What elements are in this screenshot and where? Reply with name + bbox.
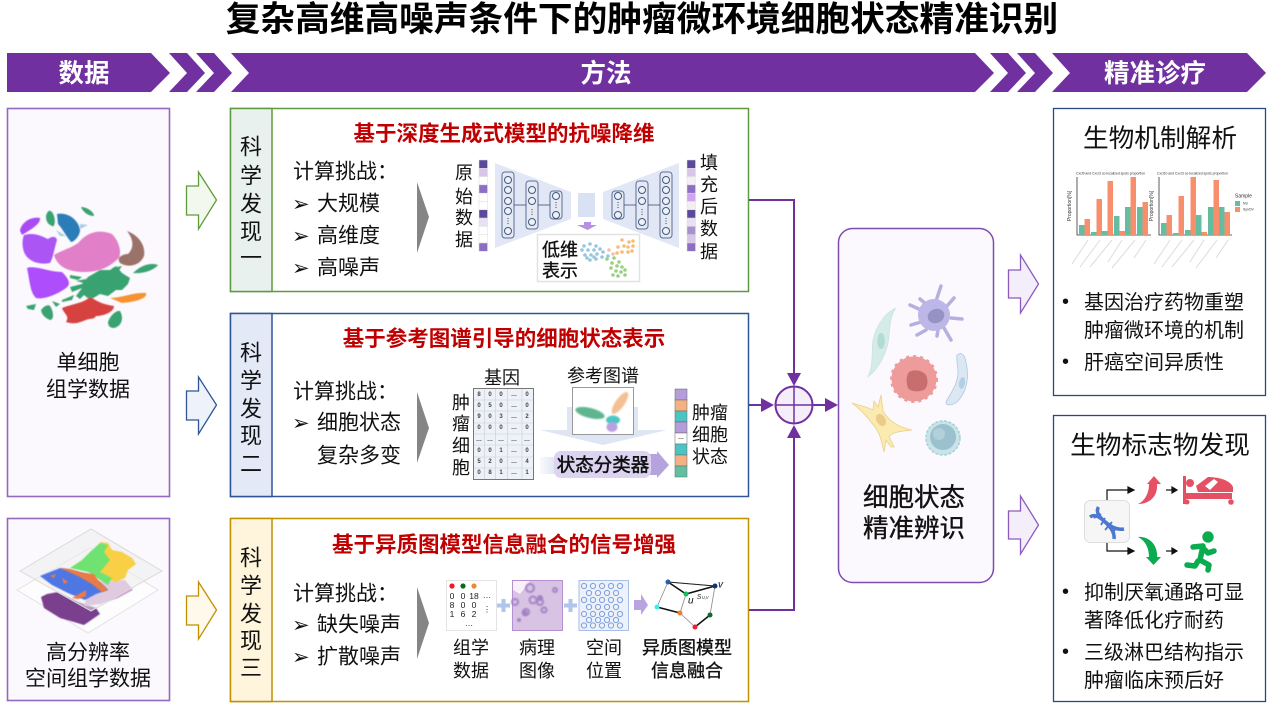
panel: discovery three [230,518,748,702]
bullets: • [1062,291,1069,313]
gene expression matrix: 5 [488,403,492,409]
chart: proportion bars [1067,172,1254,268]
omics data card: 0 [450,591,455,601]
labels: inputs: 位置 [586,661,622,681]
icon: purple dendritic cell [910,286,962,340]
label: raw data: 始 [455,187,473,207]
plus [564,599,577,612]
stage: 数据: 数据 [58,60,110,88]
heterogeneous graph: u [688,596,694,606]
autoencoder network [495,163,679,248]
chevrons: method to diagnosis [990,53,1053,92]
labels: inputs: 组学 [453,638,489,658]
icon: red tumor cell [892,356,936,402]
panel: single cell data [8,108,170,496]
bullets: 肿瘤临床预后好 [1084,669,1224,692]
arrow [417,182,429,253]
challenges list: 扩散噪声 [317,646,401,668]
icon: rising risk arrow [1138,476,1161,504]
label: filled data: 后 [700,197,718,217]
chart: proportion bars: Cxcl10 and Cxcr3 co-localized spots proportion [1157,172,1228,176]
challenges list: 复杂多变 [317,444,401,468]
side label: 科 [240,134,262,160]
panel: biological mechanism [1054,108,1266,396]
bullets [1062,291,1244,374]
bullets: 抑制厌氧通路可显 [1084,581,1244,604]
label: filled data: 数 [700,219,718,239]
side label: 发 [240,396,262,422]
gene expression matrix: 8 [488,470,492,476]
gene expression matrix: … [524,437,530,443]
label: filled data: 填 [700,153,718,173]
chevrons: data to method [169,53,232,92]
side label: 学 [240,574,262,598]
gene expression matrix: 0 [477,425,481,431]
bullets: 三级淋巴结构指示 [1084,641,1244,664]
label: 细胞状态 [863,484,965,512]
bullets: 基因治疗药物重塑 [1084,291,1244,314]
cell state column: … [678,435,684,441]
challenges list: 高噪声 [317,256,380,280]
title: 复杂高维高噪声条件下的肿瘤微环境细胞状态精准识别 [226,0,1058,39]
gene expression matrix: 0 [488,448,492,454]
omics data card: 2 [472,609,477,619]
icon: elongated teal cell [868,308,896,377]
gene expression matrix: 4 [525,459,529,465]
label: filled data [700,153,718,262]
icon: DNA [1084,500,1130,542]
gene expression matrix: … [511,425,517,431]
label: tumor cell: 肿 [452,393,470,413]
labels: inputs: 异质图模型 [642,638,732,658]
gene expression matrix: 3 [499,414,503,420]
heterogeneous graph: s [697,591,702,601]
omics data card [446,580,496,630]
gene expression matrix: 0 [499,392,503,398]
omics data card: 0 [461,600,466,610]
gene expression matrix: 0 [525,425,529,431]
gene expression matrix: … [511,414,517,420]
arrow [417,587,429,659]
latent representation [538,234,640,282]
side label: 现 [240,424,262,448]
label: 精准辨识 [863,515,965,543]
icon: patient in bed [1183,476,1234,505]
challenges list: 高维度 [317,224,380,248]
labels: inputs: 图像 [519,661,555,681]
panel: discovery two [230,314,748,496]
arrow: to mechanism [1008,255,1038,313]
bullets: • [1062,581,1069,603]
gene expression matrix: … [511,392,517,398]
label: 空间组学数据 [25,668,151,690]
label: tumor cell state: 细胞 [692,425,728,445]
gene expression matrix: 0 [525,392,529,398]
gene expression matrix: … [476,437,482,443]
challenges list: ➢ [292,645,310,669]
chart: proportion bars: Proportion[%] [1149,190,1155,221]
funnel arrow [540,407,667,445]
filled data column [687,160,696,251]
chart: spatial slide stack [17,529,162,633]
label: raw data: 据 [455,230,473,250]
arrow: single cell to discovery one [186,172,216,229]
gene expression matrix: 5 [477,459,481,465]
bullets: • [1062,641,1069,663]
cell state classifier [554,451,669,478]
cell state classifier: 状态分类器 [557,454,649,476]
gene expression matrix: … [511,459,517,465]
gene expression matrix: … [511,403,517,409]
chart: proportion bars: NS [1243,202,1248,206]
stage: 数据 [7,53,170,92]
side label: 学 [240,164,262,188]
side label: 科 [240,340,262,366]
heading: 基于深度生成式模型的抗噪降维 [353,121,655,146]
gene expression matrix: 0 [499,403,503,409]
heterogeneous graph [654,580,724,630]
omics data card: 0 [472,600,477,610]
arrow: spatial to discovery three [186,582,216,639]
challenges list: 大规模 [317,192,380,216]
heading: 生物机制解析 [1083,124,1237,153]
gene expression matrix: 8 [477,392,481,398]
challenges list: 缺失噪声 [317,614,401,636]
labels: inputs [453,638,732,681]
spatial positions grid [579,580,628,630]
chart: single cell UMAP [20,207,158,328]
label: tumor cell state: 状态 [692,447,728,467]
challenges list: 计算挑战： [293,380,398,404]
label: tumor cell: 细 [452,436,470,456]
challenges list [292,160,398,280]
panel: discovery one [230,108,748,292]
side label: 现 [240,628,262,654]
side label: 一 [240,246,262,270]
heterogeneous graph: v [718,580,724,590]
arrow: single cell to discovery two [186,377,216,434]
icon: blue curved cell [946,354,967,405]
side label: 三 [240,656,262,680]
label: reference atlas: 参考图谱 [567,366,639,386]
side label: 二 [240,452,262,476]
heading: 基于异质图模型信息融合的信号增强 [332,532,676,557]
arrow [417,392,429,463]
label: 高分辨率 [46,642,130,664]
gene expression matrix: 0 [477,448,481,454]
side label: 科 [240,546,262,570]
labels: inputs: 病理 [519,638,555,658]
icon: falling risk arrow [1138,537,1161,565]
label [25,642,151,690]
challenges list: ➢ [292,411,310,435]
gene expression matrix: 0 [488,425,492,431]
arrow [634,594,648,615]
stage: 方法 [231,53,994,92]
gene expression matrix: 1 [499,448,503,454]
label: 单细胞 [56,352,120,374]
gene expression matrix: 0 [525,403,529,409]
gene expression matrix: 2 [525,414,529,420]
side label: 发 [240,192,262,216]
side label [230,518,272,702]
gene expression matrix: 0 [488,392,492,398]
banner: process stages [7,53,1266,92]
stage: 精准诊疗 [1052,53,1266,92]
challenges list: ➢ [292,613,310,637]
challenges list: 计算挑战： [293,160,398,184]
label: tumor cell [452,393,470,478]
arrow: to latent [577,222,597,230]
reference atlas plot [572,388,634,434]
latent representation: 表示 [542,261,578,281]
label: filled data: 据 [700,242,718,262]
gene expression matrix: 2 [488,459,492,465]
gene expression matrix: … [498,437,504,443]
chart: proportion bars: SynOV [1243,208,1254,212]
label: raw data [455,163,473,250]
challenges list: 计算挑战： [293,582,398,606]
stage: 方法: 方法 [580,59,632,88]
label [46,352,130,402]
labels: inputs: 信息融合 [651,661,723,681]
stage: 精准诊疗: 精准诊疗 [1104,60,1206,88]
gene expression matrix: 0 [499,459,503,465]
gene expression matrix [474,388,534,480]
gene expression matrix: … [511,448,517,454]
bullets: 著降低化疗耐药 [1084,609,1224,632]
label: raw data: 原 [455,163,473,183]
omics data card: 18 [469,591,479,601]
panel: cell state identification [838,228,994,582]
challenges list [292,582,401,669]
chart: proportion bars: Cxcl9 and Cxcr3 co-localized spots proportion [1076,172,1145,176]
challenges list: ➢ [292,256,310,280]
chart: proportion bars: Sample [1235,194,1252,200]
labels: inputs: 空间 [586,638,622,658]
gene expression matrix: … [511,437,517,443]
heading: 基于参考图谱引导的细胞状态表示 [343,326,665,351]
gene expression matrix: 0 [477,403,481,409]
bullets: 肝癌空间异质性 [1084,351,1224,374]
gene expression matrix: … [487,437,493,443]
omics data card: 6 [461,609,466,619]
challenges list [292,380,401,468]
gene expression matrix: 1 [525,470,529,476]
gene expression matrix: 0 [525,448,529,454]
side label: 发 [240,602,262,626]
gene expression matrix: 1 [499,470,503,476]
icon: teal round cell [926,421,960,455]
bullets: • [1062,351,1069,373]
latent representation: 低维 [542,240,578,260]
label: gene: 基因 [484,368,520,388]
labels: inputs: 数据 [453,661,489,681]
plus [497,599,510,612]
panel: biomarker discovery [1054,416,1266,702]
bullets: 肿瘤微环境的机制 [1084,319,1244,342]
heading: 生物标志物发现 [1070,431,1250,460]
arrow: to biomarkers [1008,496,1038,554]
challenges list: 细胞状态 [317,412,401,434]
omics data card: ⋮ [483,604,491,614]
side label: 现 [240,220,262,244]
omics data card: … [465,618,473,628]
label: tumor cell: 瘤 [452,414,470,434]
connectors to fusion node [749,200,801,610]
label: 组学数据 [46,378,130,402]
gene expression matrix: … [511,470,517,476]
challenges list: ➢ [292,192,310,216]
raw data column [479,160,488,251]
label: filled data: 充 [700,175,718,195]
icon: running person [1187,531,1214,570]
label: tumor cell state [692,403,728,467]
omics data card: 1 [450,609,455,619]
gene expression matrix: 0 [488,414,492,420]
cell state column [675,389,687,477]
label [863,484,965,543]
label: raw data: 数 [455,208,473,228]
gene expression matrix: 0 [499,425,503,431]
label: tumor cell: 胞 [452,458,470,478]
chart: proportion bars: Proportion[%] [1067,190,1073,221]
gene expression matrix: 9 [477,414,481,420]
classifier input bar [540,457,555,474]
side label: 学 [240,368,262,394]
omics data card: 0 [461,591,466,601]
pathology image [512,580,562,630]
side label [230,314,272,496]
fusion node [776,386,838,424]
icon: yellow astrocyte cell [852,395,912,452]
panel: spatial omics data [8,518,170,700]
label: tumor cell state: 肿瘤 [692,403,728,423]
gene expression matrix: 0 [477,470,481,476]
arrows: prognosis branches [1107,487,1177,554]
omics data card: … [483,590,491,600]
side label [230,108,272,292]
challenges list: ➢ [292,224,310,248]
omics data card: 8 [450,600,455,610]
heterogeneous graph: u,v [702,595,709,601]
bullets [1062,581,1244,692]
